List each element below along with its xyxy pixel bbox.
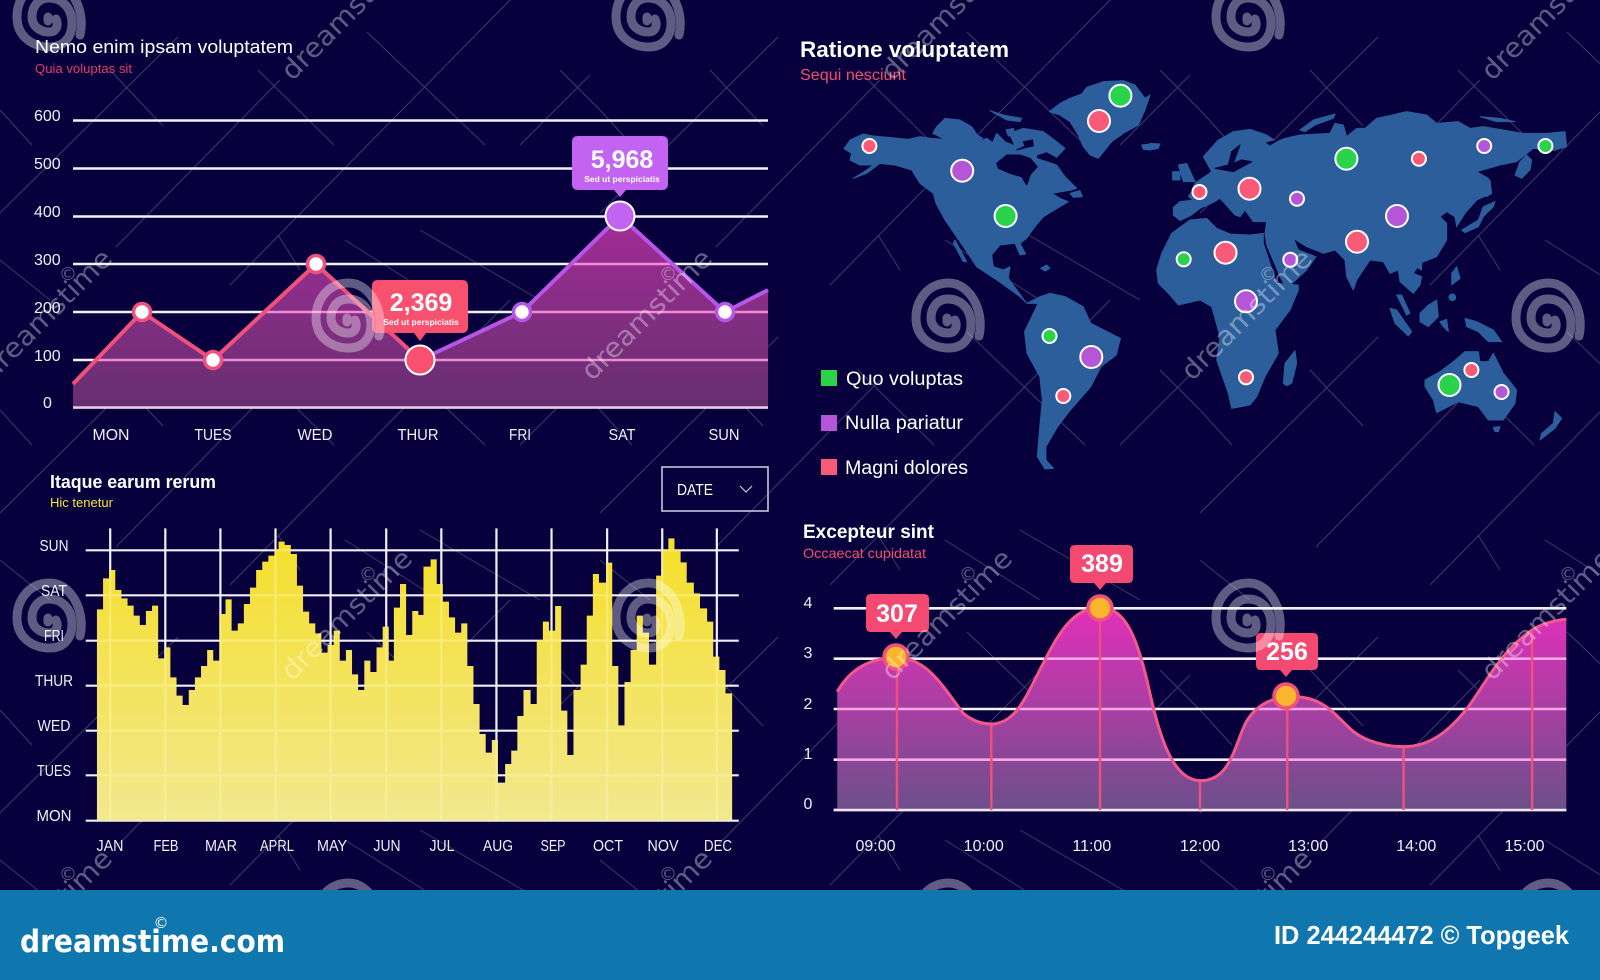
- y axis labels: 0: [43, 395, 52, 412]
- y axis labels: [34, 108, 61, 412]
- x axis labels: 10:00: [964, 838, 1004, 855]
- x axis labels: WED: [298, 427, 332, 444]
- callout: 2,369: 2,369: [390, 289, 452, 317]
- logo text: dreamstime.com: [20, 924, 285, 960]
- callout: 307: 307: [876, 600, 918, 628]
- date dropdown: [662, 467, 768, 511]
- histogram area: [86, 528, 739, 821]
- date dropdown: DATE: [677, 482, 713, 499]
- x axis labels: FEB: [154, 838, 178, 855]
- y axis labels: SUN: [40, 538, 68, 555]
- y axis labels: 600: [34, 108, 61, 125]
- callout: 256: 256: [1266, 638, 1308, 666]
- x axis labels: 13:00: [1288, 838, 1328, 855]
- legend: Quo voluptas: [846, 369, 963, 390]
- watermark overlay: dreamstime: [1175, 243, 1319, 387]
- heading: map: Ratione voluptatem: [800, 37, 1009, 62]
- y axis labels: WED: [38, 718, 70, 735]
- y axis labels: 4: [804, 595, 813, 612]
- x axis labels: 12:00: [1180, 838, 1220, 855]
- panel: monthly histogram: [35, 467, 768, 855]
- subheading: weekly chart: Quia voluptas sit: [35, 61, 132, 76]
- y axis labels: 100: [34, 348, 61, 365]
- x axis labels: THUR: [398, 427, 438, 444]
- legend: Nulla pariatur: [845, 413, 964, 434]
- line: pink series: [73, 264, 420, 384]
- x axis labels: OCT: [593, 838, 623, 855]
- curve markers: [884, 596, 1298, 708]
- x axis labels: NOV: [648, 838, 679, 855]
- watermark overlay: ©: [59, 864, 77, 885]
- africa, southeast asia and oceania: [1157, 218, 1562, 440]
- y axis labels: [35, 538, 73, 825]
- x axis labels: AUG: [483, 838, 513, 855]
- x axis labels: 15:00: [1504, 838, 1545, 855]
- y axis labels: 1: [804, 746, 813, 763]
- callout: 5,968: 5,968: [591, 146, 653, 174]
- x axis labels: 14:00: [1396, 838, 1436, 855]
- line: purple series: [420, 216, 768, 360]
- x axis labels: [92, 427, 740, 444]
- watermark overlay: dreamstime: [275, 543, 419, 687]
- americas and greenland: [844, 81, 1150, 303]
- curve area: [834, 607, 1566, 810]
- data points: [134, 202, 734, 374]
- map landmasses: [844, 81, 1567, 469]
- watermark overlay: ©: [959, 564, 977, 585]
- x axis labels: SAT: [608, 427, 636, 444]
- y axis labels: 0: [804, 796, 813, 813]
- x axis labels: 11:00: [1072, 838, 1111, 855]
- x axis labels: FRI: [509, 427, 531, 444]
- map markers: [862, 85, 1552, 403]
- y axis labels: [804, 595, 813, 813]
- x axis labels: 09:00: [855, 838, 896, 855]
- area chart: [73, 216, 768, 408]
- heading: weekly chart: Nemo enim ipsam voluptatem: [35, 37, 293, 57]
- watermark overlay: dreamstime: [575, 243, 719, 387]
- watermark overlay: dreamstime: [875, 543, 1019, 687]
- legend: Magni dolores: [845, 458, 968, 479]
- callout: 256: [1256, 633, 1318, 677]
- watermark overlay: ©: [59, 264, 77, 285]
- x axis labels: DEC: [704, 838, 732, 855]
- y axis labels: THUR: [35, 673, 73, 690]
- x axis labels: [96, 838, 732, 855]
- image id credit: ID 244244472 © Topgeek: [1274, 920, 1570, 950]
- x axis labels: SEP: [540, 838, 566, 855]
- legend: [821, 369, 968, 479]
- x axis labels: JAN: [96, 838, 124, 855]
- watermark overlay: ©: [1559, 564, 1577, 585]
- y axis labels: 2: [804, 696, 813, 713]
- y axis labels: 400: [34, 204, 61, 221]
- heading: histogram: Itaque earum rerum: [50, 472, 216, 492]
- callout: 389: 389: [1081, 550, 1123, 578]
- watermark overlay: ©: [659, 264, 677, 285]
- y axis labels: 200: [34, 300, 61, 317]
- y axis labels: SAT: [41, 583, 67, 600]
- panel: world map: [800, 37, 1567, 479]
- heading: curve chart: Excepteur sint: [803, 522, 935, 543]
- subheading: histogram: Hic tenetur: [50, 495, 114, 510]
- callout: 307: [866, 594, 929, 639]
- x axis labels: MON: [92, 427, 130, 444]
- x axis labels: [855, 838, 1545, 855]
- panel: hourly curve chart: [803, 522, 1566, 855]
- south america: [1024, 293, 1120, 469]
- callout: 2,369: Sed ut perspiciatis: [383, 317, 459, 327]
- footer banner: [0, 890, 1600, 980]
- watermark overlay: ©: [359, 564, 377, 585]
- y axis labels: MON: [36, 808, 72, 825]
- x axis labels: SUN: [708, 427, 740, 444]
- x axis labels: JUL: [430, 838, 455, 855]
- y axis labels: 3: [804, 645, 813, 662]
- y axis labels: TUES: [37, 763, 71, 780]
- x axis labels: APRL: [260, 838, 294, 855]
- subheading: curve chart: Occaecat cupidatat: [803, 545, 926, 561]
- subheading: map: Sequi nesciunt: [800, 67, 907, 84]
- callout: 389: [1070, 545, 1133, 590]
- logo mark: ©: [154, 914, 168, 932]
- watermark overlay: ©: [1259, 864, 1277, 885]
- x axis labels: JUN: [374, 838, 400, 855]
- y axis labels: 500: [34, 156, 61, 173]
- y axis labels: 300: [34, 252, 61, 269]
- x axis labels: MAR: [205, 838, 237, 855]
- x axis labels: TUES: [194, 427, 232, 444]
- watermark overlay: ©: [659, 864, 677, 885]
- callout: 5,968: [572, 136, 668, 197]
- x axis labels: MAY: [317, 838, 347, 855]
- y axis labels: FRI: [44, 628, 64, 645]
- panel: weekly line chart: [34, 37, 768, 444]
- callout: 2,369: [372, 280, 468, 341]
- watermark overlay: ©: [1259, 264, 1277, 285]
- eurasia: [1150, 112, 1567, 293]
- callout: 5,968: Sed ut perspiciatis: [584, 174, 660, 184]
